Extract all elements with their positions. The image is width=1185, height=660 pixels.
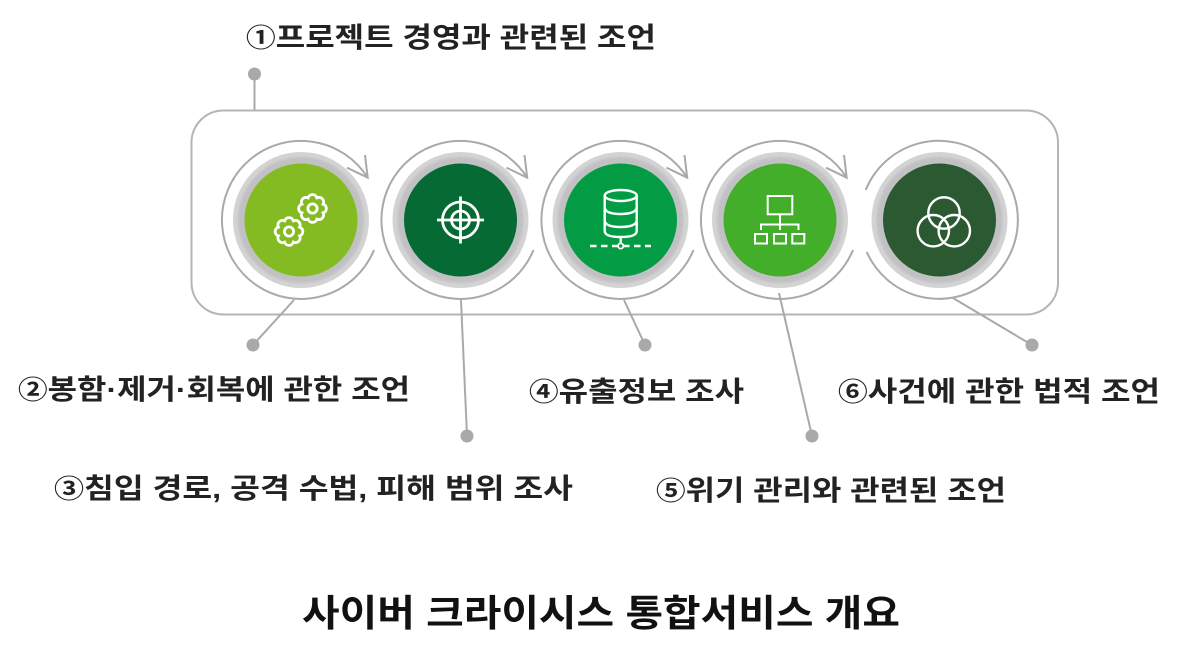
icon: gears [275, 195, 326, 245]
service 2: target circle [381, 141, 534, 299]
service 1: gears circle [222, 141, 374, 299]
label 6: ⑥사건에 관한 법적 조언 [838, 376, 1160, 407]
panel: rounded frame [192, 110, 1058, 314]
label 5: ⑤위기 관리와 관련된 조언 [656, 475, 1006, 506]
leader 6 [953, 298, 1038, 352]
service 5: venn circle [866, 141, 1018, 299]
leader 1 [248, 68, 261, 110]
leader 2 [246, 300, 294, 352]
icon: overlapping circles [918, 197, 970, 246]
leader 3 [460, 300, 474, 442]
service 3: database circle [541, 141, 694, 299]
label 3: ③침입 경로, 공격 수법, 피해 범위 조사 [54, 473, 573, 504]
icon: hierarchy [755, 196, 804, 244]
icon: database [590, 190, 651, 249]
leader 5 [779, 293, 818, 442]
label 4: ④유출정보 조사 [529, 376, 744, 407]
service 4: network circle [701, 141, 853, 299]
label 1: ①프로젝트 경영과 관련된 조언 [246, 22, 656, 53]
leader 4 [624, 300, 652, 352]
icon: target [437, 196, 484, 244]
label 2: ②봉함·제거·회복에 관한 조언 [18, 374, 410, 405]
title: 사이버 크라이시스 통합서비스 개요 [302, 593, 900, 634]
